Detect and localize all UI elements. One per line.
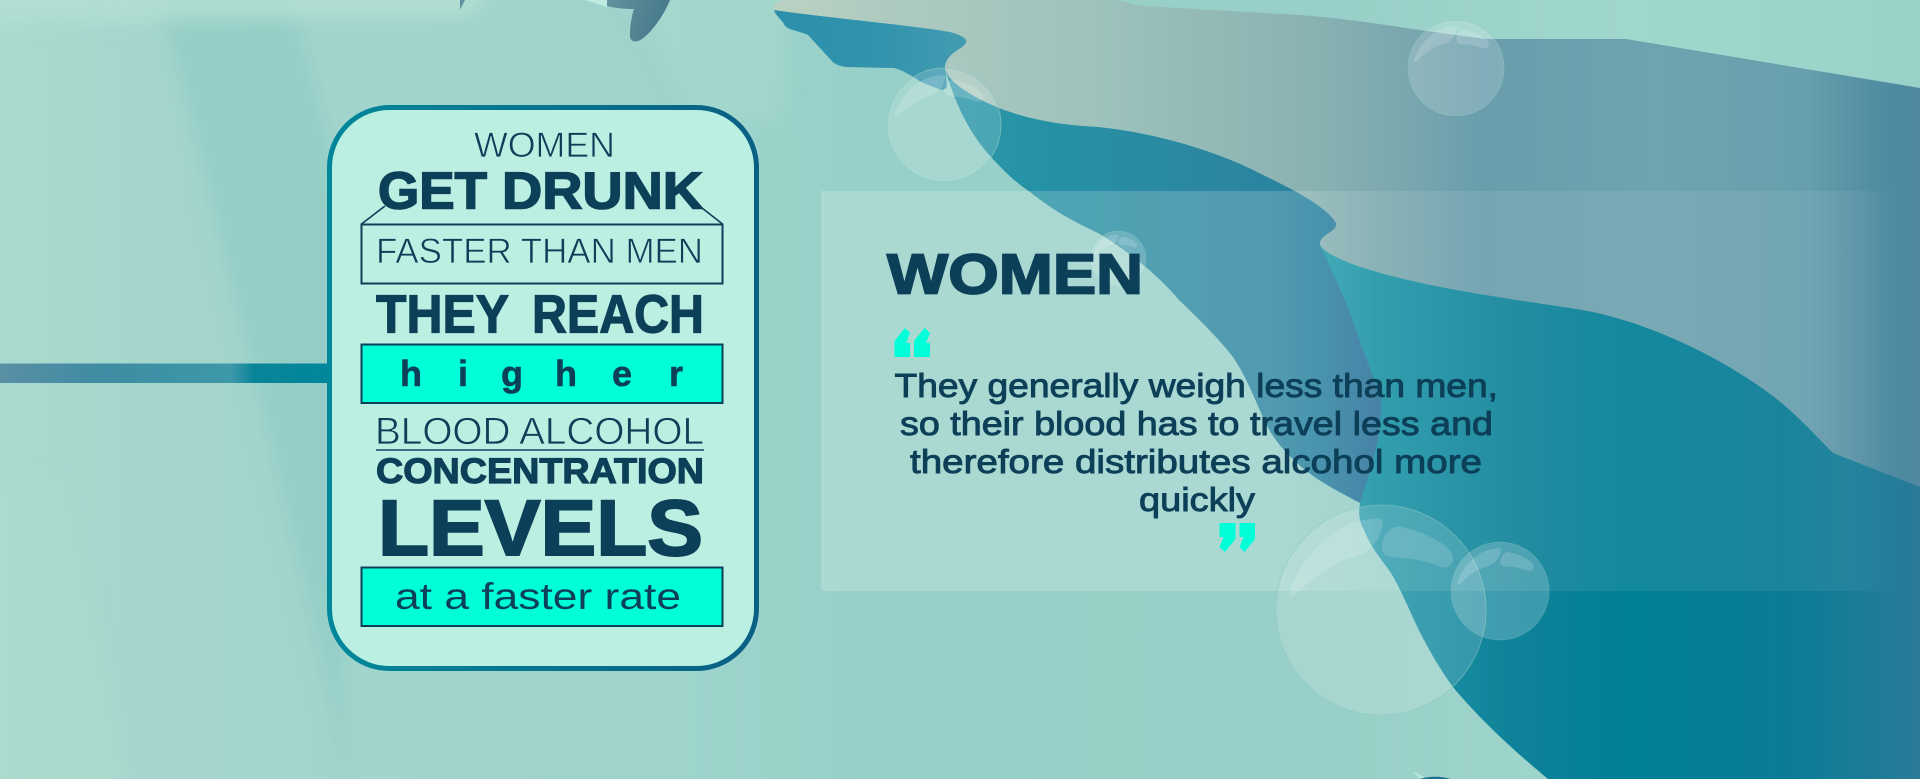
bubble: top right [1408,20,1504,116]
connector bar [0,364,330,383]
bubble: medium lower right [1451,542,1549,640]
text: GET DRUNK [378,162,703,220]
top fragment: cropped illustration above [460,0,670,41]
highlighted box: higher [362,344,722,403]
text: BLOOD ALCOHOL with underline: BLOOD ALCOHOL [375,411,704,453]
highlighted box: at a faster rate [362,568,722,626]
text: LEVELS: LEVELS [378,483,703,572]
quote text [894,367,1498,518]
outlined box with flaps: FASTER THAN MEN: FASTER THAN MEN [376,232,703,271]
highlighted box: higher: higher [400,353,683,394]
panel: typographic card [330,108,756,668]
bubble: large lower [1276,505,1486,715]
text: THEY REACH: REACH [532,284,704,344]
outlined box with flaps: FASTER THAN MEN [362,206,722,284]
icon: opening quote mark [894,328,930,357]
bottom fragment: cropped illustration below [1413,772,1450,779]
quote text: so their blood has to travel less and [900,405,1493,442]
highlighted box: at a faster rate: at a faster rate [395,576,681,617]
text: THEY REACH [376,284,704,344]
bubble: top centre [887,68,1001,182]
illustration: large flowing shape [773,0,1920,779]
text: THEY REACH: THEY [376,284,509,344]
quote text: therefore distributes alcohol more [910,443,1482,480]
icon: closing quote mark [1220,523,1255,552]
text: CONCENTRATION: CONCENTRATION [376,452,704,491]
bubble: small behind heading [1090,231,1146,287]
text: GET DRUNK: GET [378,162,487,220]
quote text: quickly [1139,481,1256,518]
text: WOMEN: WOMEN [474,126,615,165]
translucent quote panel background [821,191,1901,591]
quote text: They generally weigh less than men, [894,367,1498,404]
heading: WOMEN: WOMEN [887,242,1143,306]
text: GET DRUNK: DRUNK [502,162,703,220]
